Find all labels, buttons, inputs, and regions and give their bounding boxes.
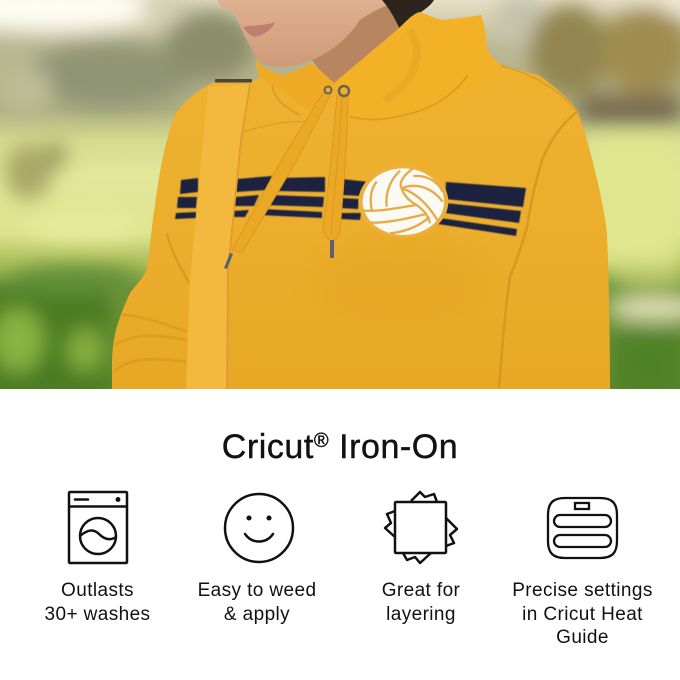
hoodie body xyxy=(112,12,610,389)
iron-on graphic: volleyball xyxy=(358,166,448,238)
face and neck xyxy=(217,0,420,90)
hood xyxy=(334,12,501,118)
label: 30+ washes xyxy=(45,604,150,624)
icon: washing machine xyxy=(68,490,128,564)
label: & apply xyxy=(224,604,290,624)
label xyxy=(45,580,150,624)
title: Cricut® Iron-On xyxy=(222,428,458,466)
label: Outlasts xyxy=(61,580,134,601)
label: layering xyxy=(386,604,456,624)
feature: easy to weed xyxy=(198,492,316,624)
shoulder strap xyxy=(186,79,252,389)
photo: woman wearing yellow hoodie with volleyball iron-on xyxy=(0,0,680,389)
label: Easy to weed xyxy=(198,580,316,601)
feature: heat guide xyxy=(512,496,653,648)
label xyxy=(382,580,460,624)
iron-on graphic: navy stripes xyxy=(175,176,526,236)
icon: heat press xyxy=(546,496,618,560)
label: in Cricut Heat xyxy=(522,604,643,624)
hair xyxy=(382,0,434,40)
label: Great for xyxy=(382,580,460,601)
label xyxy=(198,580,316,624)
feature: washes xyxy=(45,490,150,624)
feature: layering xyxy=(382,490,460,624)
folds and seams xyxy=(241,122,315,133)
label xyxy=(512,580,653,648)
label: Guide xyxy=(556,627,609,648)
label: Precise settings xyxy=(512,580,653,601)
drawstrings xyxy=(224,86,349,269)
icon: stacked sheets xyxy=(384,490,458,564)
background: blurred park xyxy=(0,0,680,400)
icon: smiley xyxy=(224,492,294,564)
